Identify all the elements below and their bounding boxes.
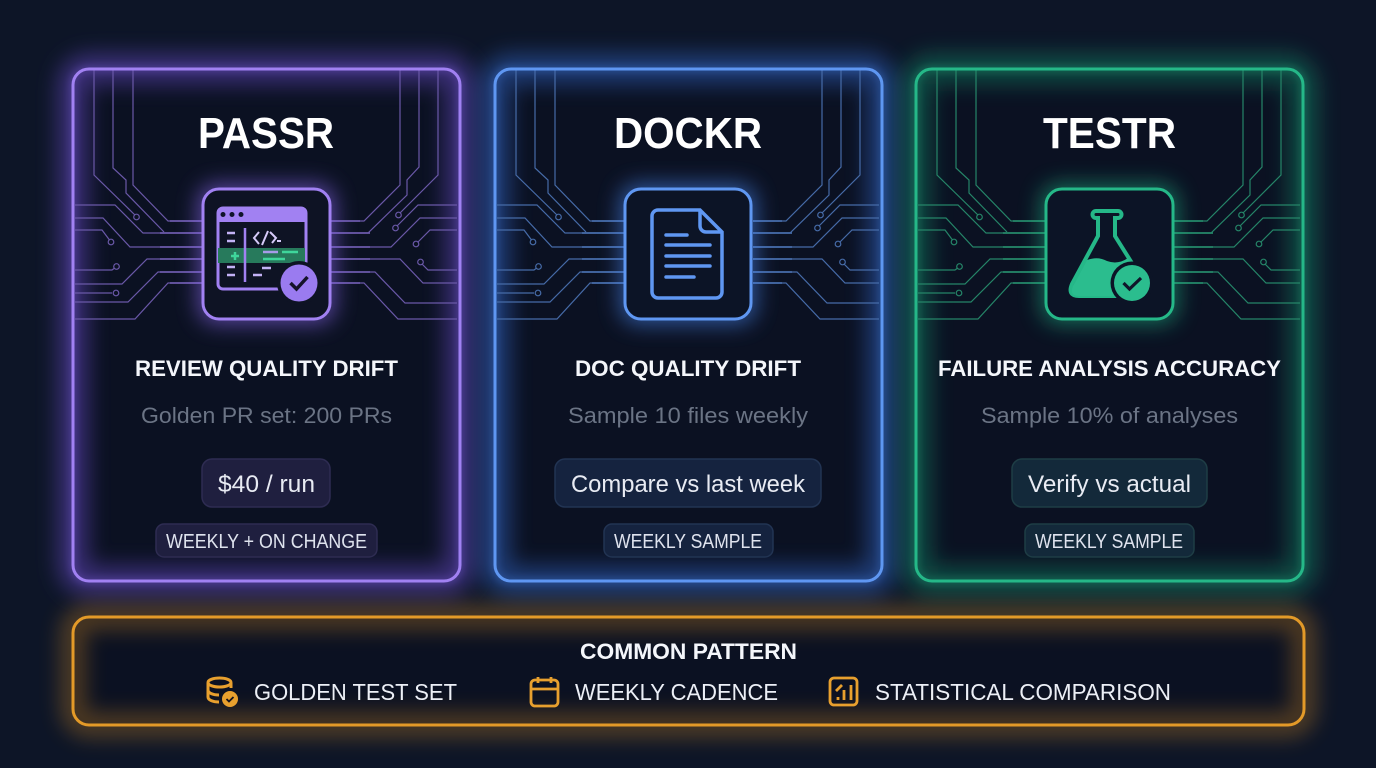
pill: comparison: Compare vs last week (571, 471, 806, 498)
tag: cadence: WEEKLY + ON CHANGE (166, 531, 367, 553)
item: statistical comparison: STATISTICAL COMPARISON (875, 679, 1171, 705)
tag: cadence: WEEKLY SAMPLE (1035, 531, 1183, 553)
heading: common pattern: COMMON PATTERN (580, 639, 797, 664)
icon: code review window (198, 184, 335, 324)
circuit traces (918, 70, 1300, 319)
icon: document (620, 184, 756, 324)
tag: cadence (1025, 524, 1194, 557)
pill: comparison (555, 459, 821, 507)
icon: bar chart (830, 678, 857, 705)
description: Sample 10% of analyses (981, 403, 1238, 428)
tag: cadence: WEEKLY SAMPLE (614, 531, 762, 553)
panel: common pattern (73, 617, 1304, 725)
circuit traces (75, 70, 457, 319)
icon: coin stack with check (208, 678, 238, 707)
panel: DOCKR (495, 69, 882, 581)
pill: cost (202, 459, 330, 507)
pill: verification: Verify vs actual (1028, 471, 1191, 498)
tag: cadence (604, 524, 773, 557)
item: weekly cadence: WEEKLY CADENCE (575, 679, 778, 705)
description: Golden PR set: 200 PRs (141, 403, 392, 428)
description: Sample 10 files weekly (568, 403, 808, 428)
subheading: DOC QUALITY DRIFT (575, 356, 802, 381)
pill: verification (1012, 459, 1207, 507)
tag: cadence (156, 524, 377, 557)
heading: TESTR: TESTR (1043, 109, 1176, 158)
pill: cost: $40 / run (218, 471, 315, 498)
icon: flask with check (1041, 184, 1178, 324)
panel: TESTR (916, 69, 1303, 581)
panel: PASSR (73, 69, 460, 581)
subheading: FAILURE ANALYSIS ACCURACY (938, 356, 1281, 381)
subheading: REVIEW QUALITY DRIFT (135, 356, 399, 381)
circuit traces (497, 70, 879, 319)
icon: calendar (531, 677, 558, 706)
heading: PASSR: PASSR (198, 109, 334, 158)
item: golden test set: GOLDEN TEST SET (254, 679, 457, 705)
heading: DOCKR: DOCKR (614, 109, 762, 158)
